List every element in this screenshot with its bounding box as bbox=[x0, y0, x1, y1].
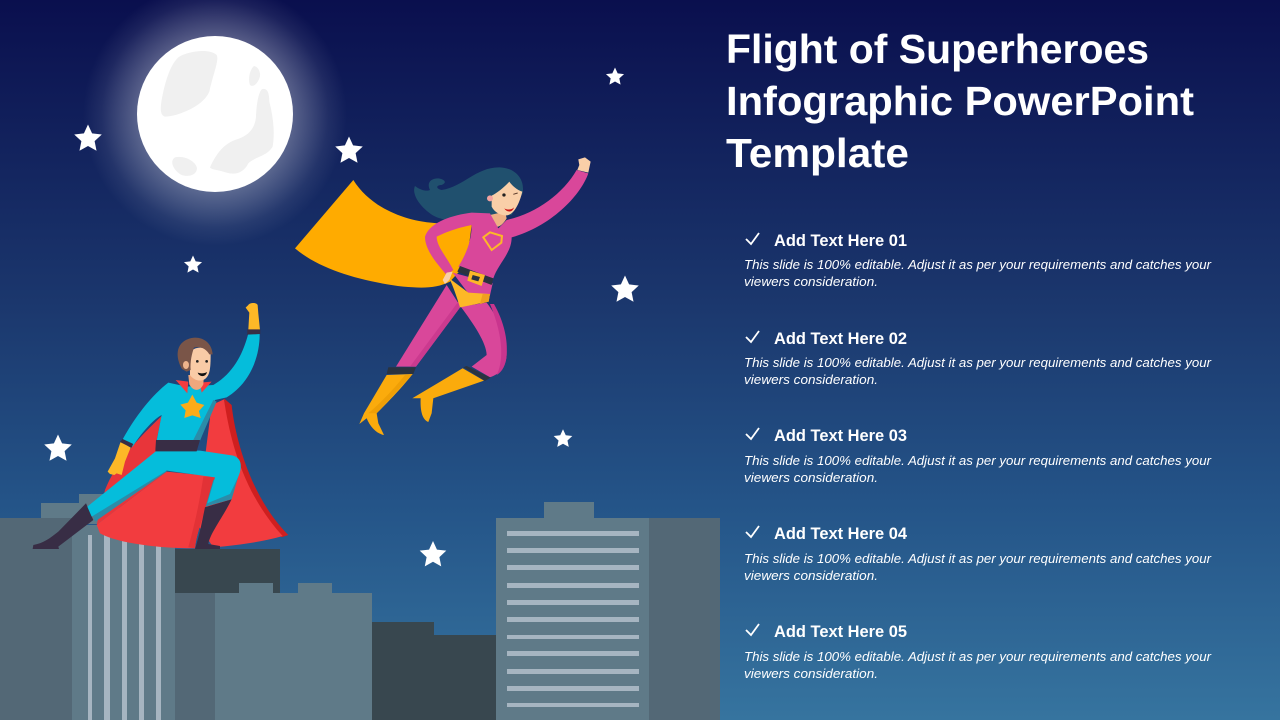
list item 01: viewers consideration. bbox=[744, 274, 878, 289]
list item 05: viewers consideration. bbox=[744, 666, 878, 681]
list item 05: This slide is 100% editable. Adjust it as per your requirements and catches your bbox=[744, 649, 1212, 664]
list item 04 bbox=[744, 524, 1212, 583]
list item 04: viewers consideration. bbox=[744, 568, 878, 583]
list item 05: Add Text Here 05 bbox=[774, 622, 907, 641]
city skyline: right buildings bbox=[372, 502, 720, 720]
list item 01: This slide is 100% editable. Adjust it as per your requirements and catches your bbox=[744, 257, 1212, 272]
male superhero bbox=[33, 303, 288, 549]
title bbox=[726, 26, 1194, 176]
list item 01 bbox=[744, 231, 1212, 289]
list item 02: viewers consideration. bbox=[744, 372, 878, 387]
list item 03: This slide is 100% editable. Adjust it as per your requirements and catches your bbox=[744, 453, 1212, 468]
list item 02: This slide is 100% editable. Adjust it as per your requirements and catches your bbox=[744, 355, 1212, 370]
list item 02 bbox=[744, 329, 1212, 387]
list item 01: Add Text Here 01 bbox=[774, 231, 907, 250]
female superhero bbox=[295, 157, 591, 435]
list item 03: viewers consideration. bbox=[744, 470, 878, 485]
list item 04: This slide is 100% editable. Adjust it as per your requirements and catches your bbox=[744, 551, 1212, 566]
title: Template bbox=[726, 130, 909, 176]
list item 02: Add Text Here 02 bbox=[774, 329, 907, 348]
title: Flight of Superheroes bbox=[726, 26, 1149, 72]
list item 03 bbox=[744, 426, 1212, 485]
moon bbox=[83, 0, 347, 246]
list item 03: Add Text Here 03 bbox=[774, 426, 907, 445]
stars bbox=[44, 68, 639, 566]
list item 04: Add Text Here 04 bbox=[774, 524, 908, 543]
list item 05 bbox=[744, 622, 1212, 681]
title: Infographic PowerPoint bbox=[726, 78, 1194, 124]
city skyline: left buildings bbox=[0, 494, 372, 720]
